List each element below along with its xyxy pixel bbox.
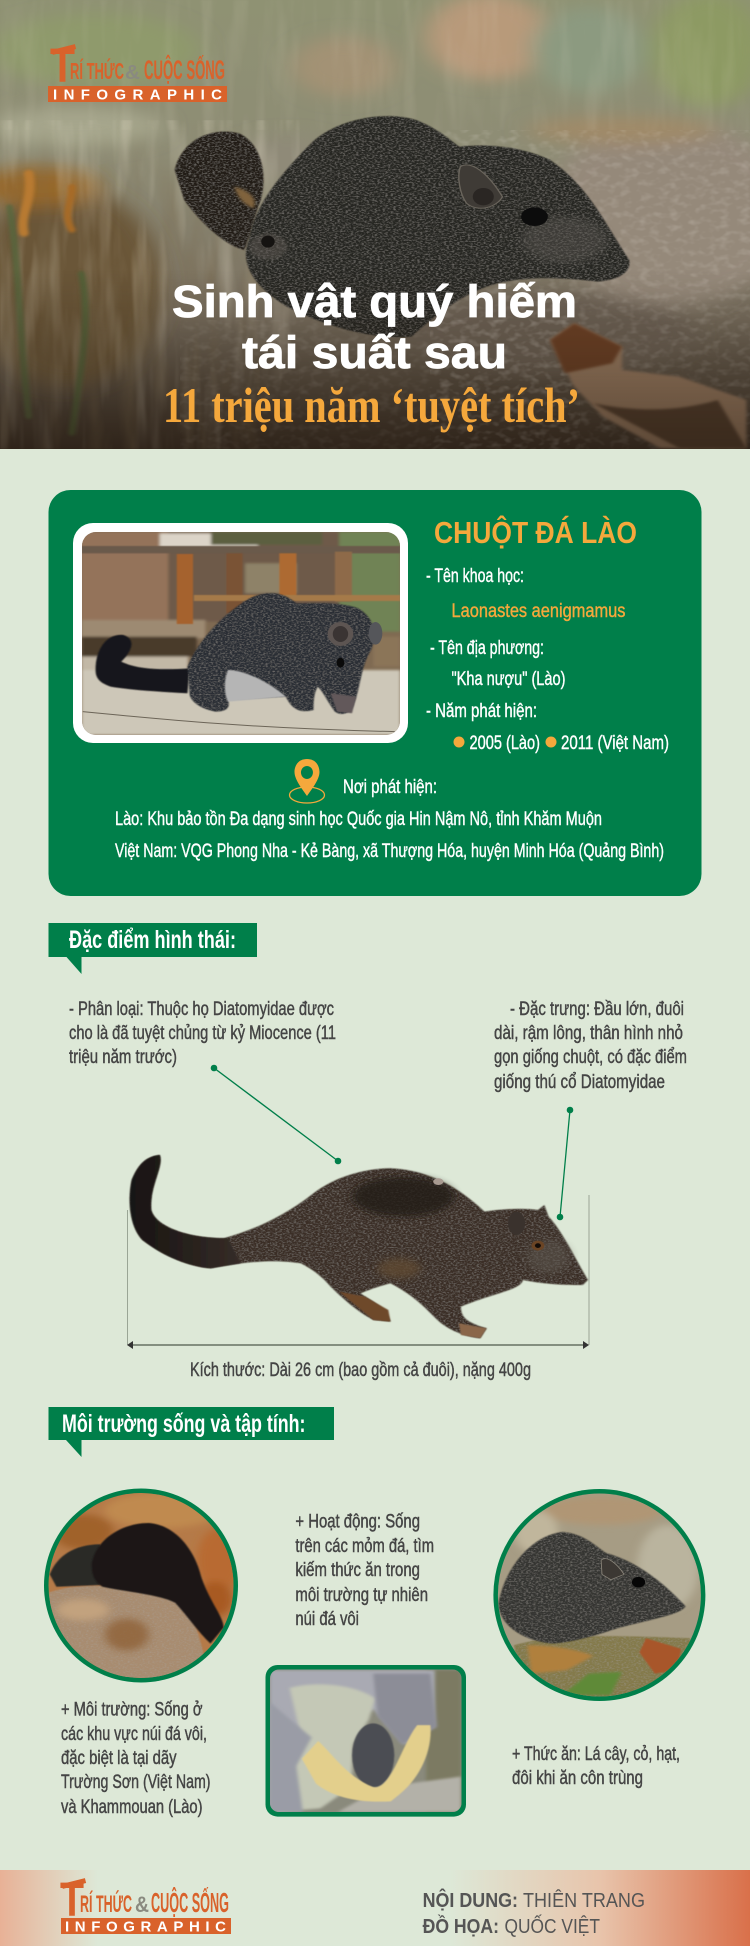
heading: morphology: Đặc điểm hình thái: xyxy=(69,926,236,954)
footer logo: RÍ THỨC xyxy=(80,1890,132,1918)
text: classification: triệu năm trước) xyxy=(69,1047,177,1068)
text: activity: núi đá vôi xyxy=(295,1609,359,1630)
text: habitat xyxy=(61,1700,210,1818)
logo: Tri Thuc & Cuoc Song Infographic xyxy=(48,40,227,104)
text: food: đôi khi ăn côn trùng xyxy=(512,1768,643,1789)
title xyxy=(163,276,580,433)
scientific name: Laonastes aenigmamus xyxy=(452,601,626,622)
text: food: + Thức ăn: Lá cây, cỏ, hạt, xyxy=(512,1744,680,1765)
photo card: rat held in gloves xyxy=(266,1665,466,1817)
hero photo: rock rat in grass xyxy=(0,0,750,450)
hero banner xyxy=(0,0,750,450)
logo: Tri Thuc & Cuoc Song Infographic: INFOGRAPHIC xyxy=(53,86,222,104)
hero rat ear xyxy=(459,165,502,208)
scientific name xyxy=(426,566,626,622)
title: 11 triệu năm ‘tuyệt tích’ xyxy=(163,377,580,433)
text: activity: môi trường tự nhiên xyxy=(295,1585,428,1606)
text: classification: cho là đã tuyệt chủng từ kỷ Miocence (11 xyxy=(69,1023,336,1044)
text: characteristics: dài, rậm lông, thân hình nhỏ xyxy=(494,1023,683,1044)
fallen leaf xyxy=(550,323,746,448)
discovery places xyxy=(115,777,664,862)
photo: rock rat specimen xyxy=(130,1155,588,1338)
discovery places: Nơi phát hiện: xyxy=(343,777,437,798)
credits xyxy=(423,1888,645,1938)
discovery years xyxy=(426,701,669,754)
discovery years: 2011 (Việt Nam) xyxy=(561,733,669,754)
pointer line: characteristics xyxy=(557,1107,573,1220)
text: classification: - Phân loại: Thuộc họ Diatomyidae được xyxy=(69,999,334,1020)
text: activity xyxy=(295,1512,434,1630)
hero rat tail xyxy=(175,132,263,250)
heading: habitat and behaviour xyxy=(48,1407,334,1457)
hero banner: CUỘC SỐNG xyxy=(144,53,225,85)
pointer line: classification xyxy=(211,1065,341,1164)
panel: species profile card xyxy=(48,490,702,896)
discovery years: - Năm phát hiện: xyxy=(426,701,537,722)
credits: NỘI DUNG: xyxy=(423,1888,518,1912)
footer logo: INFOGRAPHIC xyxy=(65,1918,226,1936)
text: characteristics xyxy=(494,999,687,1093)
text: activity: kiếm thức ăn trong xyxy=(295,1560,420,1581)
text: characteristics: - Đặc trưng: Đầu lớn, đuôi xyxy=(510,999,684,1020)
text: activity: trên các mỏm đá, tìm xyxy=(295,1536,434,1557)
text: classification xyxy=(69,999,336,1068)
footer logo xyxy=(60,1874,231,1936)
local name xyxy=(430,638,566,690)
discovery years: 2005 (Lào) xyxy=(470,733,540,754)
text: characteristics: giống thú cổ Diatomyidae xyxy=(494,1072,665,1093)
text: food xyxy=(512,1744,680,1789)
photo frame xyxy=(73,523,408,743)
photo: rock rat on wooden boards xyxy=(81,532,400,735)
local name: - Tên địa phương: xyxy=(430,638,544,659)
heading: morphology xyxy=(48,923,257,974)
logo: Tri Thuc & Cuoc Song Infographic: & xyxy=(125,62,140,84)
logo: Tri Thuc & Cuoc Song Infographic: T xyxy=(50,40,75,93)
footer logo: T xyxy=(60,1874,84,1927)
grass texture xyxy=(0,120,300,449)
text: size and weight: Kích thước: Dài 26 cm (bao gồm cả đuôi), nặng 400g xyxy=(190,1360,531,1381)
text: habitat: + Môi trường: Sống ở xyxy=(61,1700,202,1720)
photo circle: rat in leaves xyxy=(493,1488,706,1702)
local name: "Kha nượu" (Lào) xyxy=(452,669,566,690)
footer logo: & xyxy=(135,1892,149,1917)
text: characteristics: gọn giống chuột, có đặc điểm xyxy=(494,1047,687,1068)
text: habitat: các khu vực núi đá vôi, xyxy=(61,1724,207,1745)
text: habitat: Trường Sơn (Việt Nam) xyxy=(61,1772,210,1793)
title: Sinh vật quý hiếm xyxy=(172,276,577,327)
logo: Tri Thuc & Cuoc Song Infographic: RÍ THỨC xyxy=(70,57,124,84)
icon: location pin xyxy=(290,759,324,803)
title: tái suất sau xyxy=(242,327,507,378)
credits: THIÊN TRANG xyxy=(523,1889,645,1912)
dimension arrow xyxy=(127,1195,589,1349)
credits: QUỐC VIỆT xyxy=(504,1914,600,1938)
heading: habitat and behaviour: Môi trường sống và tập tính: xyxy=(62,1410,306,1438)
hero rat body xyxy=(246,116,629,337)
hero rat eye xyxy=(521,207,548,226)
species name: CHUỘT ĐÁ LÀO xyxy=(434,514,637,550)
scientific name: - Tên khoa học: xyxy=(426,566,524,587)
text: habitat: và Khammouan (Lào) xyxy=(61,1797,202,1818)
credits: ĐỒ HỌA: xyxy=(423,1914,499,1938)
text: activity: + Hoạt động: Sống xyxy=(295,1512,420,1533)
footer xyxy=(0,1870,750,1946)
text: habitat: đặc biệt là tại dãy xyxy=(61,1748,177,1769)
footer: CUỘC SỐNG xyxy=(151,1886,229,1918)
discovery places: Lào: Khu bảo tồn Đa dạng sinh học Quốc gia Hin Nậm Nô, tỉnh Khăm Muộn xyxy=(115,809,602,830)
photo circle: rat on rock xyxy=(44,1488,241,1683)
